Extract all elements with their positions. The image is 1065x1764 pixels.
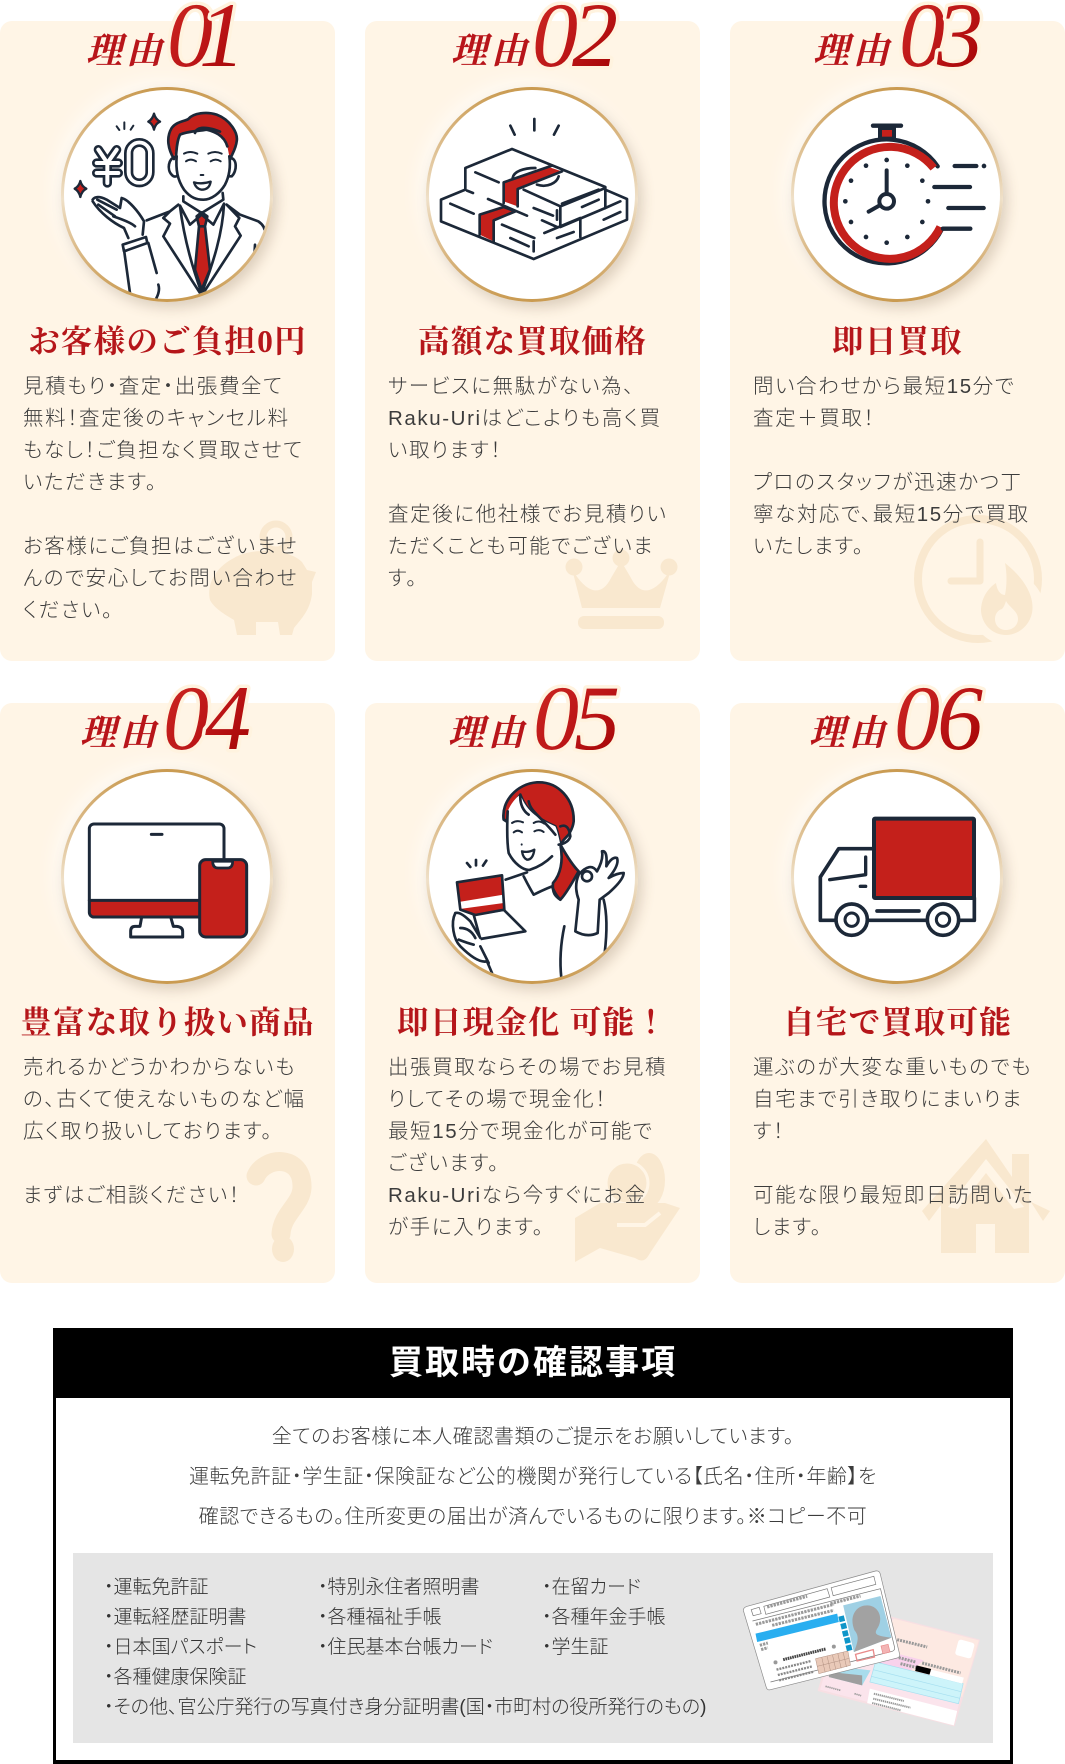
text block: reason 5: 最短15分で現金化が可能で	[388, 1120, 654, 1143]
list: documents column 3: ・学生証	[542, 1637, 609, 1658]
heading: reason number 04	[80, 667, 251, 769]
text block: reason 1: 無料！査定後のキャンセル料	[23, 407, 290, 430]
text block: reason 3: プロのスタッフが迅速かつ丁	[753, 471, 1023, 494]
text block: reason 2: す。	[388, 567, 418, 590]
text block: reason 4	[23, 1056, 306, 1207]
text block: reason 5: Raku-Uriなら今すぐにお金	[388, 1184, 647, 1207]
icon: delivery truck	[791, 769, 1003, 984]
text block: reason 2	[388, 375, 668, 590]
heading: reason number 05	[448, 667, 621, 769]
panel: confirmation items	[53, 1328, 1013, 1764]
list: documents column 3: ・各種年金手帳	[542, 1607, 666, 1628]
text block: reason 2: Raku-Uriはどこよりも高く買	[388, 407, 662, 430]
list: documents column 1: ・運転経歴証明書	[104, 1607, 247, 1628]
heading: wide range of goods: 豊富な取り扱い商品	[20, 1005, 315, 1040]
text block: reason 2: 査定後に他社様でお見積りい	[388, 503, 668, 526]
text block: reason 5: りしてその場で現金化！	[388, 1088, 607, 1111]
icon: monitor and smartphone	[61, 769, 273, 984]
text block: reason 1: 見積もり・査定・出張費全て	[23, 375, 284, 398]
heading: same day purchase: 即日買取	[832, 324, 963, 359]
list: documents column 1: ・各種健康保険証	[104, 1667, 247, 1688]
heading: reason number 01: 理由	[86, 31, 166, 71]
text block: reason 3: いたします。	[753, 535, 864, 558]
list: documents column 2: ・各種福祉手帳	[318, 1607, 442, 1628]
list: documents column 1	[104, 1577, 706, 1718]
icon: woman holding ID card	[426, 769, 638, 984]
text block: reason 1: お客様にご負担はございませ	[23, 535, 298, 558]
heading: reason number 05: 理由	[448, 713, 528, 753]
list: documents column 3: ・在留カード	[542, 1577, 641, 1598]
icon: clock with flame watermark	[914, 515, 1042, 643]
heading: reason number 01	[86, 0, 245, 86]
list: documents column 1: ・その他、官公庁発行の写真付き身分証明書(国・市町村の役所発行のもの)	[104, 1697, 706, 1718]
heading: high price: 高額な買取価格	[418, 324, 647, 359]
text block: reason 2: サービスに無駄がない為、	[388, 375, 635, 398]
list: documents column 2: ・特別永住者照明書	[318, 1577, 480, 1598]
icon: question mark watermark	[246, 1152, 312, 1262]
panel: reason 6	[730, 703, 1065, 1283]
icon: hand with coins watermark	[575, 1153, 680, 1262]
heading: reason number 04: 理由	[80, 713, 160, 753]
heading: confirmation items: 買取時の確認事項	[389, 1344, 677, 1382]
heading: instant cash: 即日現金化 可能！	[397, 1005, 668, 1040]
text block: reason 4: の、古くて使えないものなど幅	[23, 1088, 306, 1111]
text block: reason 5	[388, 1056, 667, 1239]
text block: reason 6: 可能な限り最短即日訪問いた	[753, 1184, 1034, 1207]
text block: reason 3: 問い合わせから最短15分で	[753, 375, 1015, 398]
text block: reason 4: 売れるかどうかわからないも	[23, 1056, 296, 1079]
panel: reason 5	[365, 703, 700, 1283]
text block: reason 2: ただくことも可能でございま	[388, 535, 654, 558]
text block: reason 3: 査定＋買取！	[753, 407, 875, 430]
text block: reason 3: 寧な対応で、最短15分で買取	[753, 503, 1030, 526]
list: documents column 1: ・日本国パスポート	[104, 1637, 257, 1658]
text block: ID requirement	[189, 1426, 877, 1528]
text block: reason 5: ございます。	[388, 1152, 500, 1175]
panel: reason 1	[0, 21, 335, 661]
text block: reason 6	[753, 1056, 1034, 1239]
heading: reason number 05: 05	[533, 667, 620, 769]
heading: reason number 02	[451, 0, 620, 86]
heading: reason number 03: 理由	[813, 31, 893, 71]
text block: reason 5: が手に入ります。	[388, 1216, 544, 1239]
text block: reason 6: 自宅まで引き取りにまいりま	[753, 1088, 1023, 1111]
icon: ID cards illustration	[743, 1570, 980, 1726]
heading: reason number 03	[813, 0, 984, 86]
text block: reason 3	[753, 375, 1030, 558]
icon: crown watermark	[566, 550, 678, 629]
icon: bundles of cash	[426, 87, 638, 302]
text block: ID requirement: 確認できるもの。住所変更の届出が済んでいるものに限ります。※コピー不可	[199, 1506, 867, 1528]
text block: reason 4: まずはご相談ください！	[23, 1184, 241, 1207]
list: documents column 2: ・住民基本台帳カード	[318, 1637, 493, 1658]
text block: ID requirement: 全てのお客様に本人確認書類のご提示をお願いしています。	[272, 1426, 794, 1448]
text block: reason 6: 運ぶのが大変な重いものでも	[753, 1056, 1032, 1079]
icon: stopwatch	[791, 87, 1003, 302]
heading: purchase at home: 自宅で買取可能	[783, 1005, 1012, 1040]
text block: reason 6: す！	[753, 1120, 785, 1143]
heading: reason number 04: 04	[163, 667, 251, 769]
text block: reason 1: いただきます。	[23, 471, 157, 494]
text block: ID requirement: 運転免許証・学生証・保険証など公的機関が発行している【氏名・住所・年齢】を	[189, 1466, 877, 1488]
list: documents column 2	[318, 1577, 493, 1658]
icon: piggy bank watermark	[209, 520, 316, 635]
text block: reason 1	[23, 375, 304, 622]
list: documents column 1: ・運転免許証	[104, 1577, 209, 1598]
list: documents column 3	[542, 1577, 666, 1658]
icon: house watermark	[922, 1139, 1050, 1253]
heading: reason number 06	[809, 667, 986, 769]
text block: reason 6: します。	[753, 1216, 822, 1239]
heading: zero burden: お客様のご負担0円	[28, 324, 307, 359]
panel: reason 4	[0, 703, 335, 1283]
heading: reason number 02: 理由	[451, 31, 531, 71]
text block: reason 1: もなし！ご負担なく買取させて	[23, 439, 304, 462]
icon: businessman with yen zero	[61, 87, 273, 302]
text block: reason 1: んので安心してお問い合わせ	[23, 567, 298, 590]
panel: reason 2	[365, 21, 700, 661]
text block: reason 4: 広く取り扱いしております。	[23, 1120, 273, 1143]
text block: reason 2: い取ります！	[388, 439, 502, 462]
panel: reason 3	[730, 21, 1065, 661]
text block: reason 1: ください。	[23, 599, 114, 622]
panel: accepted documents	[73, 1553, 993, 1743]
text block: reason 5: 出張買取ならその場でお見積	[388, 1056, 667, 1079]
heading: reason number 06: 理由	[809, 713, 889, 753]
heading: reason number 06: 06	[894, 667, 983, 769]
